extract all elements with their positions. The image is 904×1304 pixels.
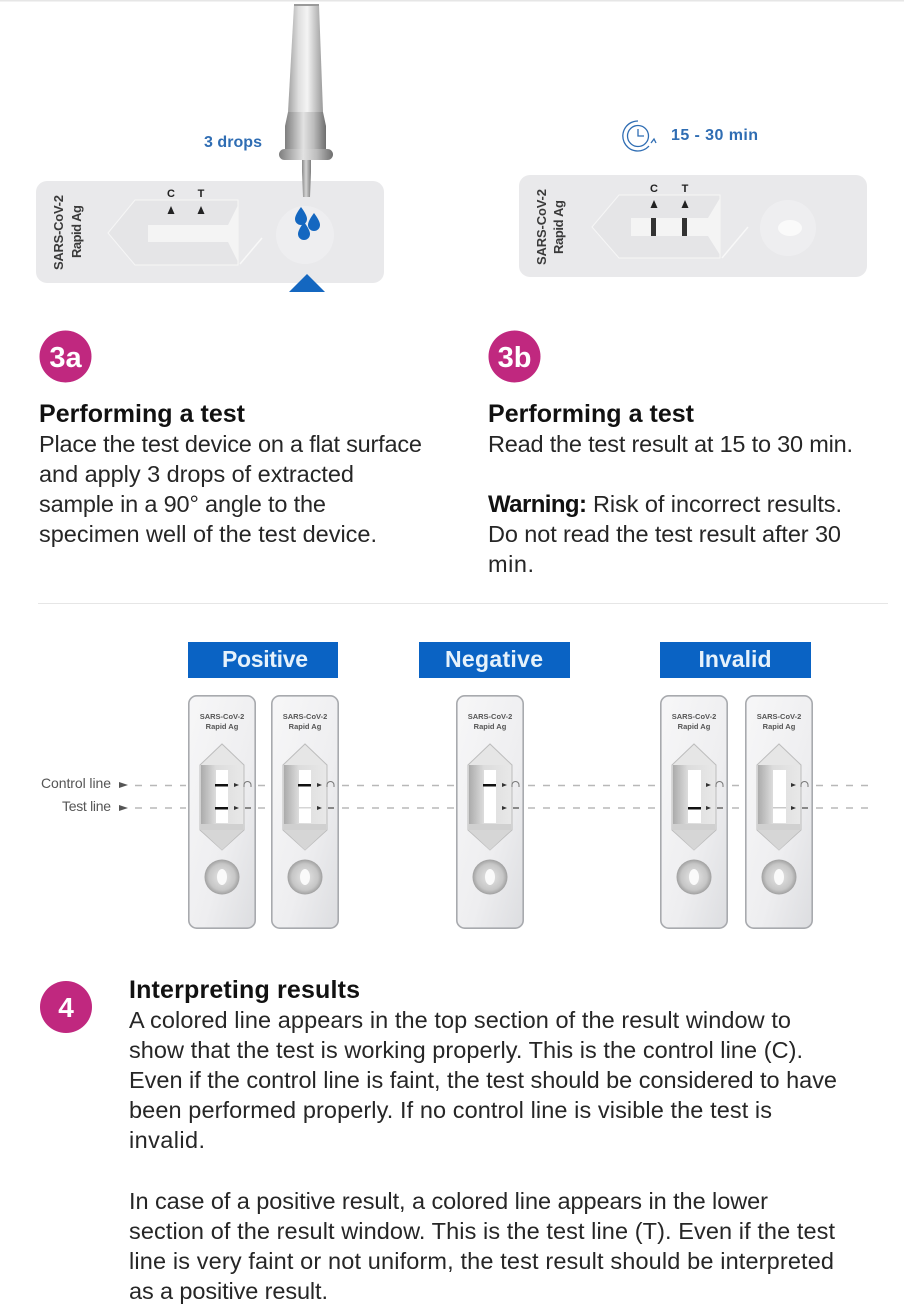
text block: control line: invalid. <box>129 1127 205 1153</box>
tag: Positive <box>188 642 338 678</box>
text block: control line: A colored line appears in the top section of the result window to <box>129 1007 791 1033</box>
test device with result lines: Rapid Ag <box>551 200 566 254</box>
tag: Invalid: Invalid <box>698 646 772 672</box>
tag: Negative: Negative <box>445 646 543 672</box>
badge 4: 4 <box>58 992 74 1023</box>
tag: Negative <box>419 642 570 678</box>
step 3a <box>39 330 422 547</box>
text block: control line: show that the test is working properly. This is the control line (C). <box>129 1037 803 1063</box>
label: 3 drops: 3 drops <box>204 134 262 151</box>
text block 3b <box>488 431 853 577</box>
device: positive 1: SARS-CoV-2 <box>200 712 244 721</box>
section divider <box>38 603 888 604</box>
label: 15 - 30 min: 15 - 30 min <box>671 127 758 144</box>
dropper bottle <box>279 4 333 197</box>
text block: test line: In case of a positive result, a colored line appears in the lower <box>129 1188 768 1214</box>
device: invalid 2: SARS-CoV-2 <box>757 712 801 721</box>
text block 3a <box>39 431 422 547</box>
text block 3b: Risk of incorrect results. <box>593 491 842 517</box>
test device horizontal: SARS-CoV-2 <box>51 195 66 270</box>
blue triangle marker <box>289 274 325 292</box>
text block 3b: Do not read the test result after 30 <box>488 521 841 547</box>
test device horizontal: T <box>198 188 205 200</box>
device: invalid 1 <box>661 696 727 928</box>
text block 3a: Place the test device on a flat surface <box>39 431 422 457</box>
line labels: Control line <box>41 775 111 791</box>
text block 3a: specimen well of the test device. <box>39 521 377 547</box>
text block 3b: Read the test result at 15 to 30 min. <box>488 431 853 457</box>
tag: Positive: Positive <box>222 646 308 672</box>
heading 3a: Performing a test <box>39 400 246 428</box>
test device with result lines: SARS-CoV-2 <box>534 189 549 265</box>
illustration: applying 3 drops to the test device <box>36 4 384 292</box>
device: invalid 2: Rapid Ag <box>763 722 796 731</box>
test device with result lines <box>519 175 867 277</box>
device: positive 1 <box>189 696 255 928</box>
step 3b <box>488 330 853 577</box>
text block 3b: min. <box>488 551 534 577</box>
text block: test line: as a positive result. <box>129 1278 328 1304</box>
text block: control line: been performed properly. If no control line is visible the test is <box>129 1097 772 1123</box>
text block 3a: and apply 3 drops of extracted <box>39 461 354 487</box>
badge 3b <box>488 330 540 382</box>
badge 3a <box>40 330 92 382</box>
text block: test line: line is very faint or not uniform, the test result should be interpreted <box>129 1248 834 1274</box>
test device horizontal: Rapid Ag <box>69 205 84 258</box>
icon: clock <box>623 121 656 151</box>
badge 3a: 3a <box>49 342 82 374</box>
test device with result lines: T <box>682 183 689 195</box>
text block: control line <box>129 1007 837 1153</box>
device: invalid 1: Rapid Ag <box>678 722 711 731</box>
text block 3b: Warning: <box>488 491 587 518</box>
device: negative <box>457 696 523 928</box>
dashed guide lines <box>135 786 870 808</box>
badge 4 <box>40 981 92 1033</box>
test device horizontal: C <box>167 188 175 200</box>
text block: test line: section of the result window. This is the test line (T). Even if the test <box>129 1218 835 1244</box>
icon: three blue drops <box>295 207 320 240</box>
test device horizontal <box>36 181 384 283</box>
results chart <box>41 642 870 928</box>
illustration: reading the test after 15 to 30 minutes <box>519 121 867 277</box>
text block 3a: sample in a 90° angle to the <box>39 491 326 517</box>
device: invalid 1: SARS-CoV-2 <box>672 712 716 721</box>
heading 4: Interpreting results <box>129 976 360 1004</box>
line labels <box>41 775 128 814</box>
badge 3b: 3b <box>498 342 531 374</box>
device: negative: SARS-CoV-2 <box>468 712 512 721</box>
text block: test line <box>129 1188 835 1304</box>
device: positive 1: Rapid Ag <box>206 722 239 731</box>
text block: control line: Even if the control line is faint, the test should be considered to have <box>129 1067 837 1093</box>
top rule <box>0 0 904 2</box>
device: positive 2 <box>272 696 338 928</box>
test device with result lines: C <box>650 183 658 195</box>
device: positive 2: Rapid Ag <box>289 722 322 731</box>
tag: Invalid <box>660 642 811 678</box>
line labels: Test line <box>62 798 111 814</box>
heading 3b: Performing a test <box>488 400 695 428</box>
device: invalid 2 <box>746 696 812 928</box>
device: positive 2: SARS-CoV-2 <box>283 712 327 721</box>
device: negative: Rapid Ag <box>474 722 507 731</box>
step 4 <box>40 976 837 1304</box>
